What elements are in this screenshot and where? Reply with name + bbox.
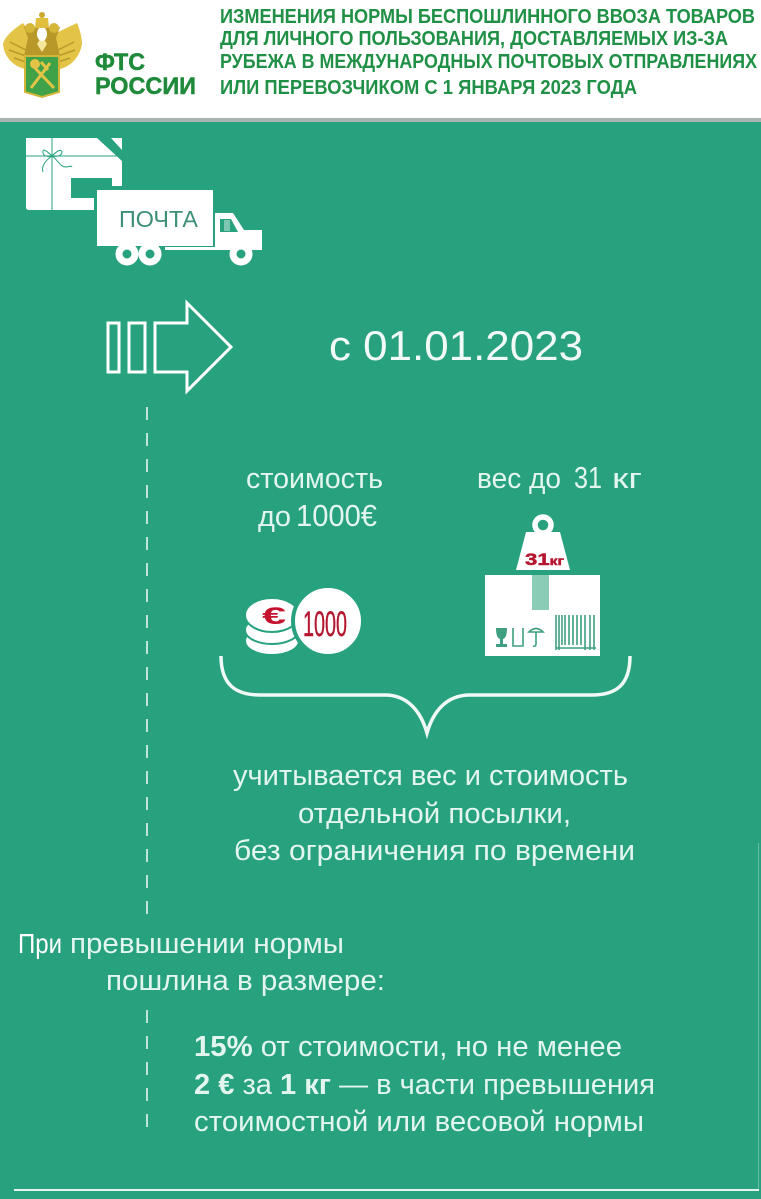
rule description: отдельной посылки, bbox=[298, 798, 571, 830]
icon: mail truck bbox=[97, 190, 262, 262]
rule description: без ограничения по времени bbox=[234, 835, 635, 867]
icon: coins 1000 euro bbox=[245, 586, 363, 656]
icon: parcel with 31 kg weight bbox=[485, 517, 600, 656]
dashed timeline bbox=[146, 407, 148, 1130]
label: weight limit: 31 bbox=[574, 460, 602, 495]
label: value limit: стоимость bbox=[246, 463, 383, 495]
title: ИЛИ ПЕРЕВОЗЧИКОМ С 1 ЯНВАРЯ 2023 ГОДА bbox=[220, 76, 637, 99]
label: value limit: до bbox=[258, 501, 291, 533]
duty details: 15% от стоимости, но не менее bbox=[194, 1031, 622, 1063]
label: weight limit: кг bbox=[612, 463, 642, 495]
label: value limit bbox=[246, 463, 383, 533]
label: weight limit: вес до bbox=[477, 463, 561, 495]
excess heading: превышении нормы bbox=[70, 928, 344, 960]
logo text: ФТС России: ФТС bbox=[95, 49, 145, 76]
duty details bbox=[194, 1031, 655, 1138]
excess heading: При bbox=[18, 928, 62, 959]
icon: parcel with 31 kg weight: 31 кг bbox=[525, 550, 564, 569]
rule description bbox=[233, 760, 635, 867]
excess heading bbox=[18, 928, 385, 997]
date: с 01.01.2023 bbox=[329, 322, 583, 369]
excess heading: пошлина в размере: bbox=[106, 965, 385, 997]
truck lettering: ПОЧТА bbox=[119, 206, 198, 232]
label: value limit: 1000€ bbox=[296, 498, 377, 533]
rule description: учитывается вес и стоимость bbox=[233, 760, 628, 792]
icon: FCS emblem bbox=[3, 12, 82, 97]
brace bbox=[221, 656, 630, 733]
duty details: стоимостной или весовой нормы bbox=[194, 1106, 644, 1138]
header band bbox=[0, 0, 761, 122]
arrow bbox=[108, 303, 231, 391]
label: weight limit bbox=[477, 460, 642, 495]
title bbox=[220, 5, 757, 99]
icon: parcel bbox=[26, 138, 122, 210]
duty details: 2 € за 1 кг — в части превышения bbox=[194, 1069, 655, 1101]
logo text: ФТС России bbox=[95, 49, 196, 100]
logo text: ФТС России: РОССИИ bbox=[95, 73, 196, 100]
icon: coins 1000 euro: 1000 bbox=[303, 605, 347, 644]
icon: coins 1000 euro: € bbox=[262, 603, 286, 630]
